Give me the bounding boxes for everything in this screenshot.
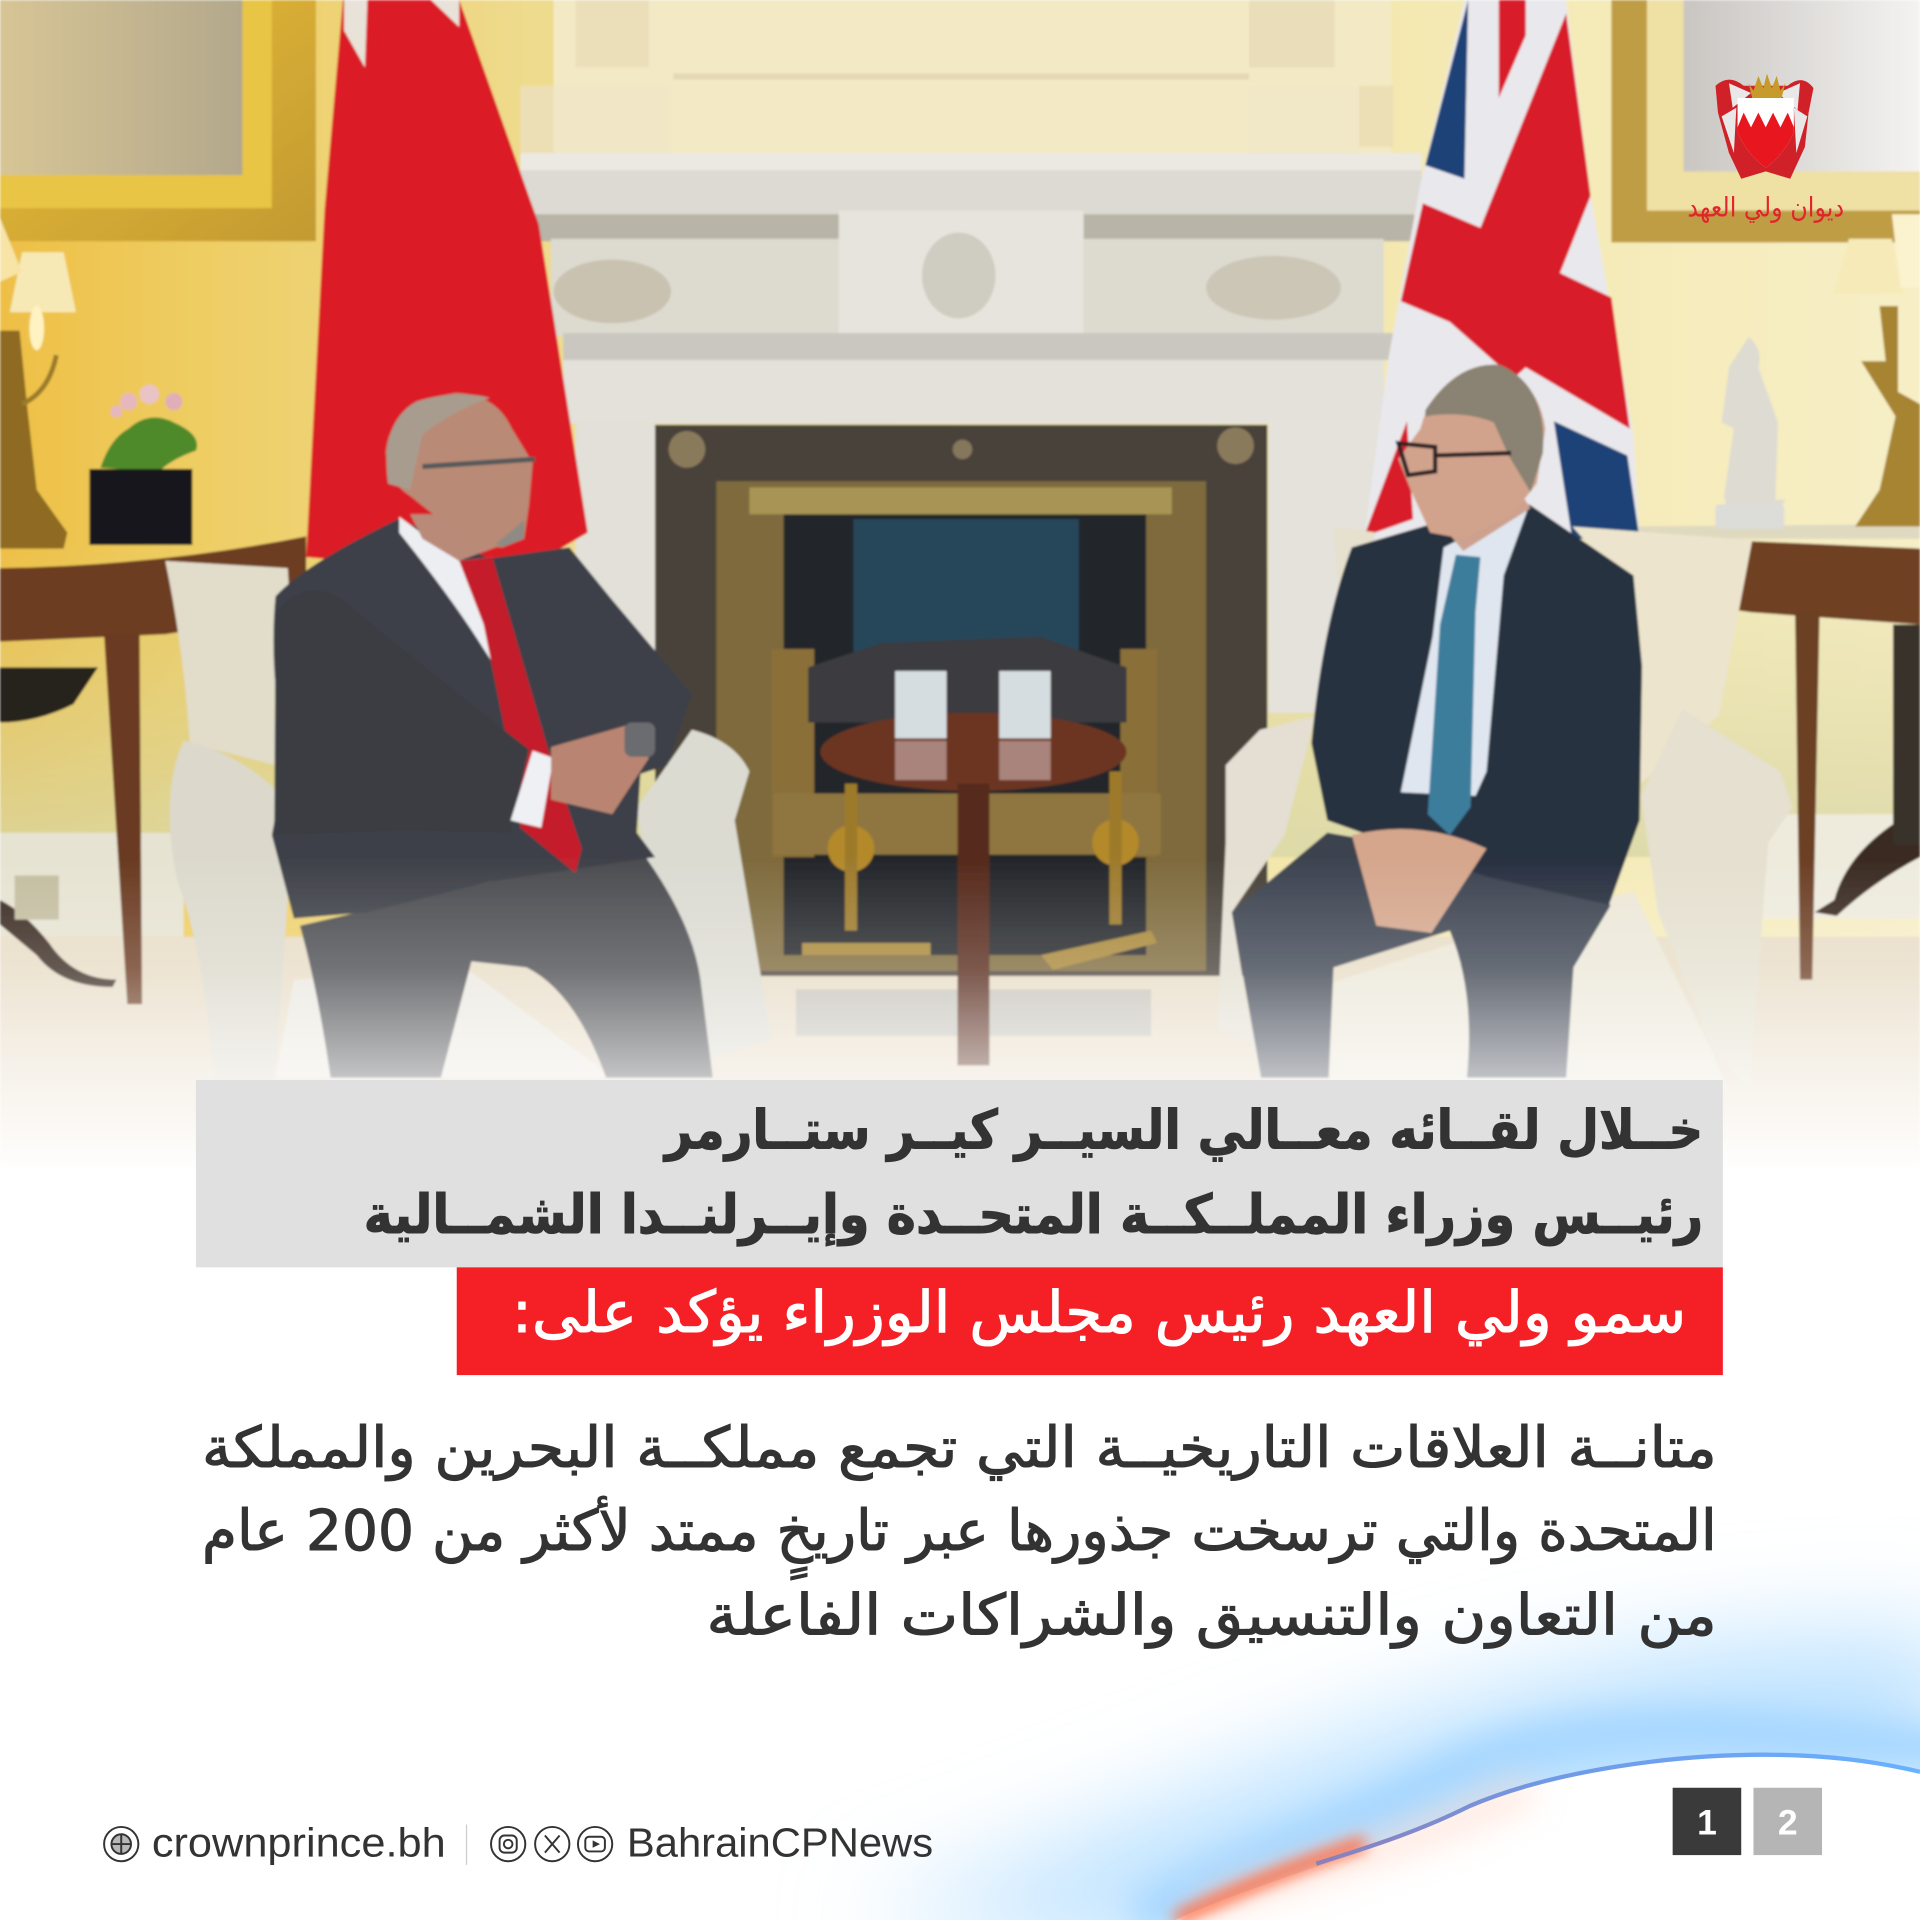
fireplace — [655, 425, 1267, 976]
jacket — [1311, 504, 1642, 905]
clasped hands — [1352, 829, 1487, 933]
icon: instagram — [491, 1827, 525, 1861]
floor and carpet — [0, 937, 1920, 1169]
trousers — [300, 845, 713, 1078]
lower wall shading — [0, 539, 1920, 857]
neck — [410, 514, 502, 561]
headline grey panel — [196, 1080, 1723, 1267]
handle text: BahrainCPNews — [627, 1819, 933, 1865]
left man: Crown Prince — [272, 393, 713, 1078]
right painting — [1611, 0, 1920, 242]
hair — [1425, 365, 1543, 492]
footer social handles — [491, 1819, 933, 1865]
body text line 2: المتحدة والتي ترسخت جذورها عبر تاريخٍ ممتد لأكثر من 200 عام — [202, 1496, 1717, 1581]
bottom photo fade to white — [0, 857, 1920, 1178]
right man: Prime Minister — [1232, 365, 1642, 1078]
head — [386, 393, 533, 547]
icon: globe — [104, 1827, 138, 1861]
hands — [551, 722, 649, 814]
right side table — [1633, 524, 1920, 980]
left side table — [0, 536, 306, 1004]
shirt cuff — [511, 751, 553, 828]
flowers in black pot — [89, 384, 197, 545]
skirting board right — [1763, 814, 1920, 918]
website text: crownprince.bh — [152, 1819, 446, 1865]
logo: Crown Prince Court emblem — [1687, 73, 1844, 224]
marble mantel — [520, 153, 1422, 718]
fender and fire irons — [796, 771, 1157, 1036]
left painting — [0, 0, 316, 241]
blue tie — [1428, 555, 1480, 835]
hair — [387, 394, 490, 490]
page indicator 2: 2 — [1778, 1802, 1798, 1842]
body text line 3: من التعاون والتنسيق والشراكات الفاعلة — [707, 1584, 1717, 1649]
shirt collar and front — [399, 517, 500, 673]
UK flag — [1364, 0, 1640, 539]
icon: youtube — [578, 1827, 612, 1861]
skirting board left — [0, 833, 184, 937]
footer website — [104, 1819, 446, 1865]
page indicator 1 — [1673, 1788, 1741, 1855]
right armchair — [1217, 527, 1793, 1090]
Bahrain flag — [306, 0, 588, 576]
jacket sleeve — [274, 590, 529, 835]
left lamp — [0, 218, 76, 549]
page indicator 2 — [1753, 1788, 1822, 1855]
neck — [1433, 490, 1531, 551]
crown — [1749, 73, 1785, 98]
red subheading text: سمو ولي العهد رئيس مجلس الوزراء يؤكد على: — [512, 1279, 1686, 1347]
logo Arabic caption: ديوان ولي العهد — [1687, 193, 1844, 224]
headline line 2: رئيــس وزراء المملــكــة المتحــدة وإيــرلنــدا الشمــالية — [364, 1183, 1703, 1246]
photo: meeting in fireplace room — [0, 0, 1920, 1178]
statue — [1716, 337, 1785, 529]
trousers — [1232, 833, 1610, 1078]
left armchair — [165, 561, 771, 1078]
beard — [496, 520, 524, 547]
watch — [624, 722, 655, 757]
icon: X — [535, 1827, 569, 1861]
wall — [0, 0, 1920, 967]
shield — [1738, 98, 1794, 168]
page indicator 1: 1 — [1697, 1802, 1717, 1842]
red subheading panel — [457, 1267, 1723, 1375]
jacket — [272, 519, 692, 918]
shield red field — [1738, 113, 1794, 168]
shirt — [1401, 504, 1529, 796]
mantling — [1716, 80, 1813, 179]
glasses — [422, 459, 535, 467]
headline line 1: خــلال لقــائه معــالي السيــر كيــر ستــارمر — [662, 1099, 1703, 1162]
right lamp — [1833, 214, 1920, 527]
head — [1398, 365, 1545, 539]
red tie — [459, 557, 582, 873]
body text line 1: متانــة العلاقات التاريخيــة التي تجمع مملكــة البحرين والمملكة — [202, 1416, 1717, 1481]
mantelpiece upper columns — [520, 0, 1393, 153]
tea table with glasses — [820, 671, 1127, 1065]
decorative wave with blue and orange glow — [857, 1633, 1920, 1920]
glasses — [1398, 443, 1511, 475]
